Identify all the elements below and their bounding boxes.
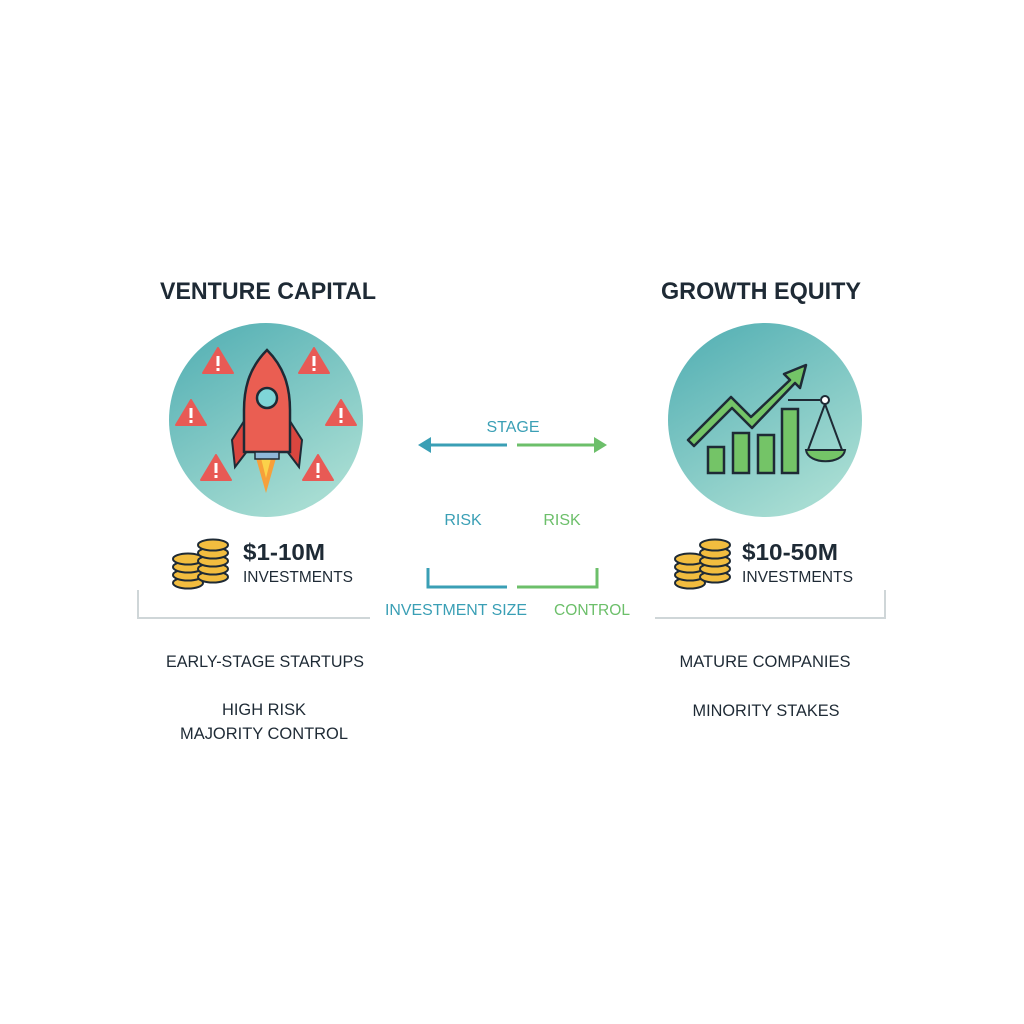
middle: stage arrows xyxy=(418,419,607,453)
middle: stage arrows: STAGE xyxy=(486,419,540,436)
middle: size/control brackets xyxy=(385,568,630,619)
bracket lines xyxy=(138,590,885,618)
title: venture capital: VENTURE CAPITAL xyxy=(160,278,376,305)
icon: coins left xyxy=(173,540,228,588)
text: ge amount: INVESTMENTS xyxy=(742,569,853,586)
text: ge traits: MINORITY STAKES xyxy=(692,701,840,720)
middle: size/control brackets: CONTROL xyxy=(554,602,630,619)
middle: risk labels: RISK xyxy=(444,512,482,529)
title: growth equity: GROWTH EQUITY xyxy=(661,278,861,305)
icon: coins right xyxy=(675,540,730,588)
middle: risk labels xyxy=(444,512,581,529)
middle: risk labels: RISK xyxy=(543,512,581,529)
text: vc amount: $1-10M xyxy=(243,539,325,565)
text: ge traits xyxy=(680,652,850,720)
text: vc amount: INVESTMENTS xyxy=(243,569,353,586)
text: vc amount xyxy=(243,539,353,586)
text: ge traits: MATURE COMPANIES xyxy=(680,652,850,671)
text: vc traits xyxy=(166,652,364,743)
icon: rocket circle xyxy=(169,323,363,517)
icon: growth chart circle xyxy=(668,323,862,517)
text: ge amount: $10-50M xyxy=(742,539,838,565)
middle: size/control brackets: INVESTMENT SIZE xyxy=(385,602,527,619)
text: vc traits: EARLY-STAGE STARTUPS xyxy=(166,652,364,671)
text: vc traits: MAJORITY CONTROL xyxy=(180,724,348,743)
text: vc traits: HIGH RISK xyxy=(222,700,307,719)
text: ge amount xyxy=(742,539,853,586)
